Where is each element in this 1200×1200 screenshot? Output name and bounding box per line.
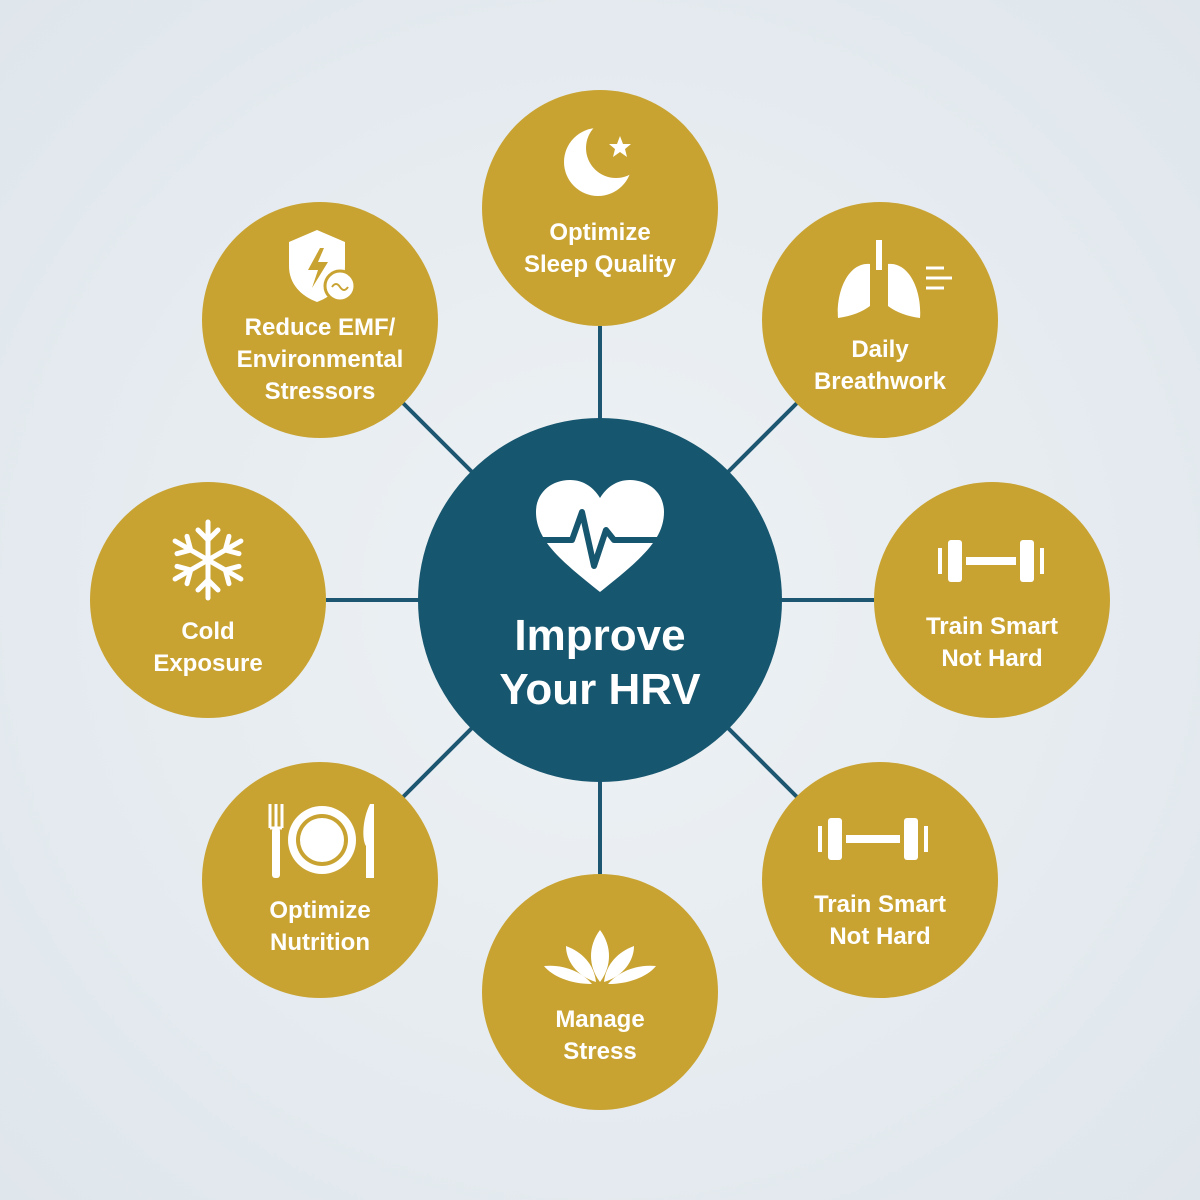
node: cold exposure: Exposure (153, 650, 263, 677)
node: EMF: Reduce EMF/ (245, 314, 396, 341)
node: cold exposure (90, 482, 326, 718)
node: manage stress: Manage (555, 1006, 645, 1033)
node: cold exposure: Cold (181, 618, 235, 645)
node: train right: Not Hard (941, 645, 1043, 672)
node: breathwork (762, 202, 998, 438)
node: sleep: Optimize (549, 219, 651, 246)
node: EMF: Environmental (237, 346, 403, 373)
node: EMF: Stressors (265, 378, 375, 405)
node: breathwork: Breathwork (814, 368, 947, 395)
icon: heart with pulse (536, 480, 664, 592)
connector lines (326, 326, 874, 874)
node: train bottom-right: Not Hard (829, 923, 931, 950)
node: EMF (202, 202, 438, 438)
node: manage stress: Stress (563, 1038, 637, 1065)
node: breathwork: Daily (851, 336, 909, 363)
node: train bottom-right: Train Smart (814, 891, 946, 918)
node: nutrition: Optimize (269, 897, 371, 924)
center hub (418, 418, 782, 782)
node: sleep: Sleep Quality (524, 251, 677, 278)
node: nutrition: Nutrition (270, 929, 370, 956)
node: nutrition (202, 762, 438, 998)
node: train bottom-right (762, 762, 998, 998)
node: manage stress (482, 874, 718, 1110)
node: train right (874, 482, 1110, 718)
center title: Improve (514, 611, 686, 660)
node: train right: Train Smart (926, 613, 1058, 640)
center hub: Your HRV (499, 665, 701, 714)
node: sleep (482, 90, 718, 326)
